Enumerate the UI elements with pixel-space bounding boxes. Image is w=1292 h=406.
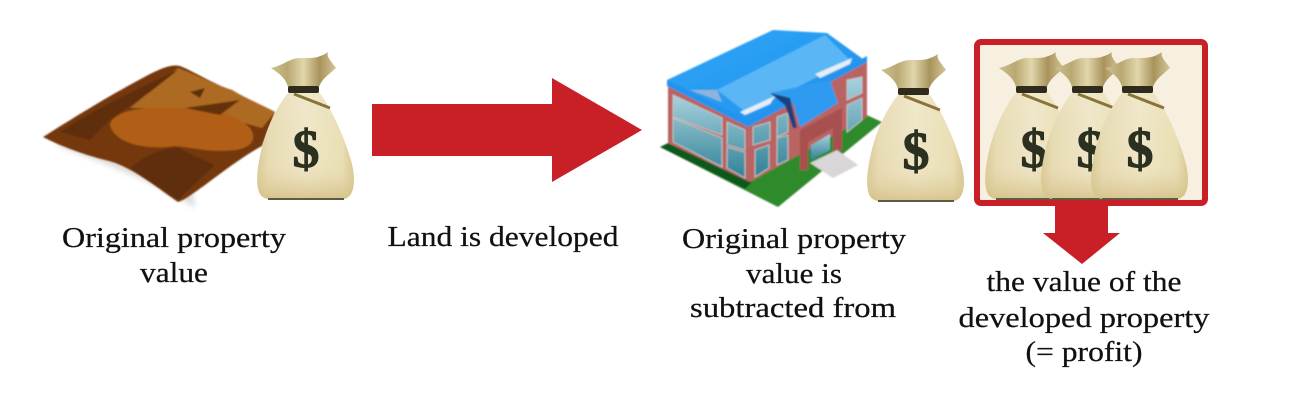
path [810,150,858,178]
label: original value subtracted [682,223,907,324]
icon: three money bags: $ [1126,119,1154,179]
label: original property value: value [140,257,208,289]
icon: money bag beside land [257,52,354,199]
icon: undeveloped land [43,65,275,208]
label: original property value [62,222,287,289]
icon: three money bags [985,52,1188,199]
icon: money bag beside land: $ [292,119,320,179]
entrance canopy [770,80,838,127]
label: original property value: Original property [62,222,287,254]
left wall [668,85,750,182]
icon: three money bags: $ [1020,119,1048,179]
right wall [749,60,867,182]
entrance portico [800,108,842,170]
arrow: down to profit [1043,206,1120,264]
icon: money bag beside building [867,54,964,201]
roof [667,30,867,127]
label: original value subtracted: Original property [682,223,907,255]
icon: money bag beside building: $ [902,121,930,181]
icon: developed building [660,30,882,207]
icon: three money bags: $ [1076,119,1104,179]
label: original value subtracted: subtracted from [690,292,896,324]
label: developed value equals profit: (= profit) [1026,336,1142,368]
label: developed value equals profit: the value of the [986,266,1182,298]
label: land is developed: Land is developed [388,221,619,253]
ground [660,112,882,207]
arrow: development [372,78,642,182]
label: original value subtracted: value is [746,258,842,290]
label: developed value equals profit [958,266,1210,368]
panel: profit box [977,42,1205,203]
label: developed value equals profit: developed property [958,302,1210,334]
